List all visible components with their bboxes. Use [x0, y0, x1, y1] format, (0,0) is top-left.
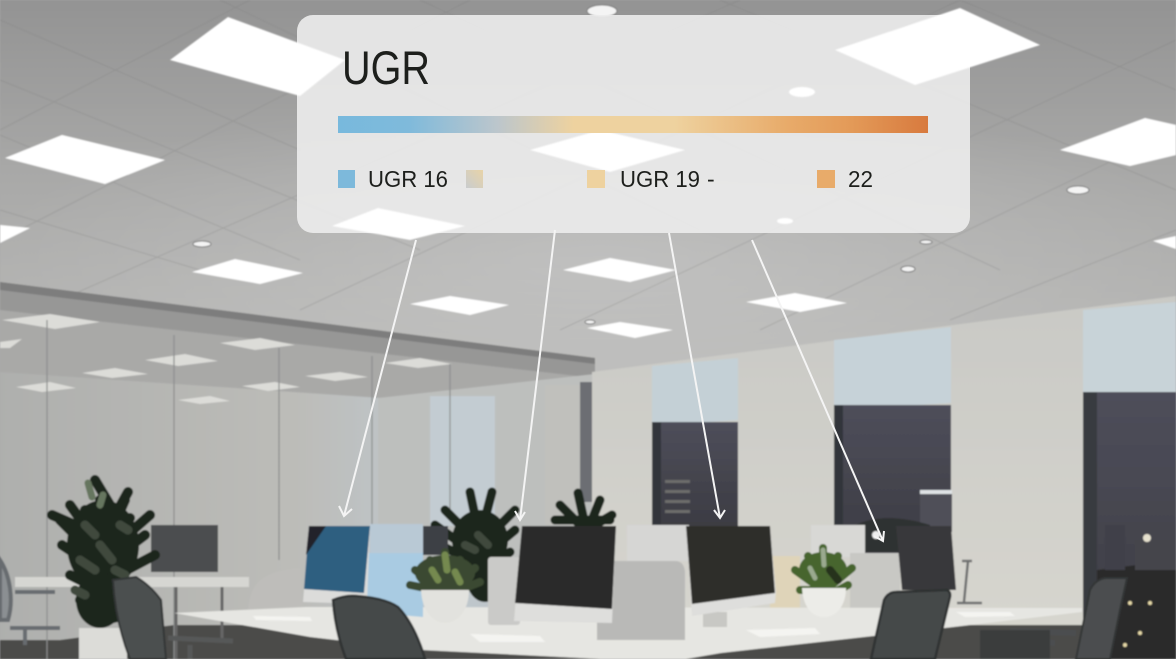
- left glass room: [0, 310, 595, 640]
- legend item: UGR 16: UGR 16: [368, 166, 448, 192]
- plant: centre tall plant: [435, 492, 515, 602]
- glass mullions: [47, 320, 450, 659]
- monitor: far right: [896, 526, 956, 590]
- monitor: blue: [303, 526, 370, 604]
- glass room ceiling: [0, 308, 595, 402]
- ceiling: [0, 0, 1176, 400]
- window 2: [834, 327, 951, 410]
- legend item: 22: [817, 166, 873, 192]
- gradient scale bar: [338, 116, 928, 133]
- desk lamp: [957, 561, 982, 603]
- plant pot: desk right: [802, 588, 846, 617]
- back desk and monitor: [151, 525, 218, 572]
- legend item: UGR 19 -: [587, 166, 715, 192]
- arrow: to far right monitor: [752, 240, 884, 541]
- arrow: to right centre monitor: [669, 233, 725, 518]
- white partition: [488, 557, 520, 625]
- back wall: [378, 374, 595, 560]
- chair: left: [113, 577, 166, 659]
- legend item: UGR 19 -: UGR 19: [620, 166, 700, 192]
- plant pot: [79, 628, 127, 659]
- window 1: [652, 358, 738, 426]
- legend item: UGR 19 -: -: [707, 166, 715, 192]
- monitor: centre: [514, 526, 616, 623]
- back partitions: [370, 524, 423, 554]
- ceiling lights outside panel: [0, 118, 1176, 338]
- legend: [338, 166, 873, 192]
- legend swatch: transition: [466, 170, 483, 188]
- grey partition: [597, 561, 685, 640]
- plant: left floor plant: [52, 480, 155, 628]
- title: UGR: [342, 41, 430, 94]
- plant: desk plant left: [410, 552, 480, 592]
- arrow: to blue monitor: [339, 240, 416, 516]
- plant: behind centre monitor: [555, 493, 612, 525]
- chair: right centre: [871, 590, 950, 659]
- desk surface: [174, 607, 1082, 659]
- chair: far right: [1076, 578, 1127, 659]
- legend item: 22: 22: [848, 166, 873, 192]
- soffit beam: [0, 282, 595, 378]
- chair: centre: [333, 596, 425, 659]
- ceiling lights over panel: [170, 8, 1040, 240]
- floor: [0, 600, 1176, 659]
- plant: desk plant right: [795, 548, 852, 592]
- UGR legend panel: [170, 8, 1040, 240]
- arrow: to centre monitor: [515, 230, 555, 520]
- keyboards: [253, 612, 1015, 642]
- far left chair: [0, 560, 60, 645]
- window 3: [1083, 302, 1176, 393]
- blue partition: [365, 553, 423, 617]
- downlights: [193, 5, 1089, 324]
- plant pot: desk left: [421, 590, 469, 623]
- glass room reflections: [0, 314, 452, 404]
- right wall: [592, 296, 1176, 625]
- monitor: right centre: [686, 526, 776, 627]
